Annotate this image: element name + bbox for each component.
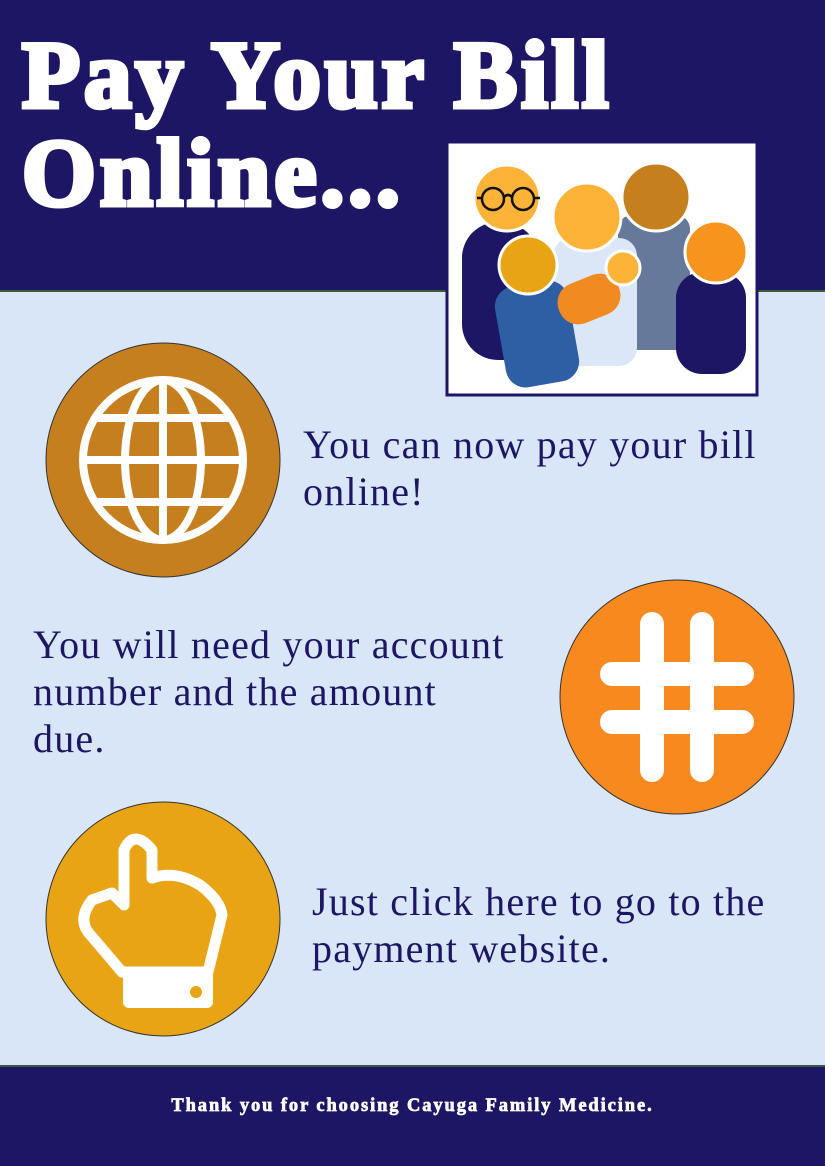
text: account number: number and the amount	[33, 669, 437, 714]
text: account number: due.	[33, 716, 106, 761]
title: Online...	[22, 120, 404, 226]
icon: globe	[46, 343, 280, 577]
footer band	[0, 1065, 825, 1166]
text: pay online	[303, 422, 757, 514]
title	[21, 22, 612, 226]
footer text: Thank you for choosing Cayuga Family Medicine.	[171, 1096, 654, 1116]
text: click here: payment website.	[312, 926, 611, 971]
text: pay online: online!	[303, 469, 425, 514]
icon: pointing hand	[46, 802, 280, 1036]
icon: hash	[560, 580, 794, 814]
text: account number: You will need your account	[33, 622, 505, 667]
title: Pay Your Bill	[22, 22, 612, 128]
text: click here: Just click here to go to the	[312, 879, 766, 924]
text: click here	[312, 879, 766, 971]
text: account number	[33, 622, 505, 761]
illustration: family	[447, 142, 757, 395]
text: pay online: You can now pay your bill	[303, 422, 757, 467]
header band	[0, 0, 825, 292]
